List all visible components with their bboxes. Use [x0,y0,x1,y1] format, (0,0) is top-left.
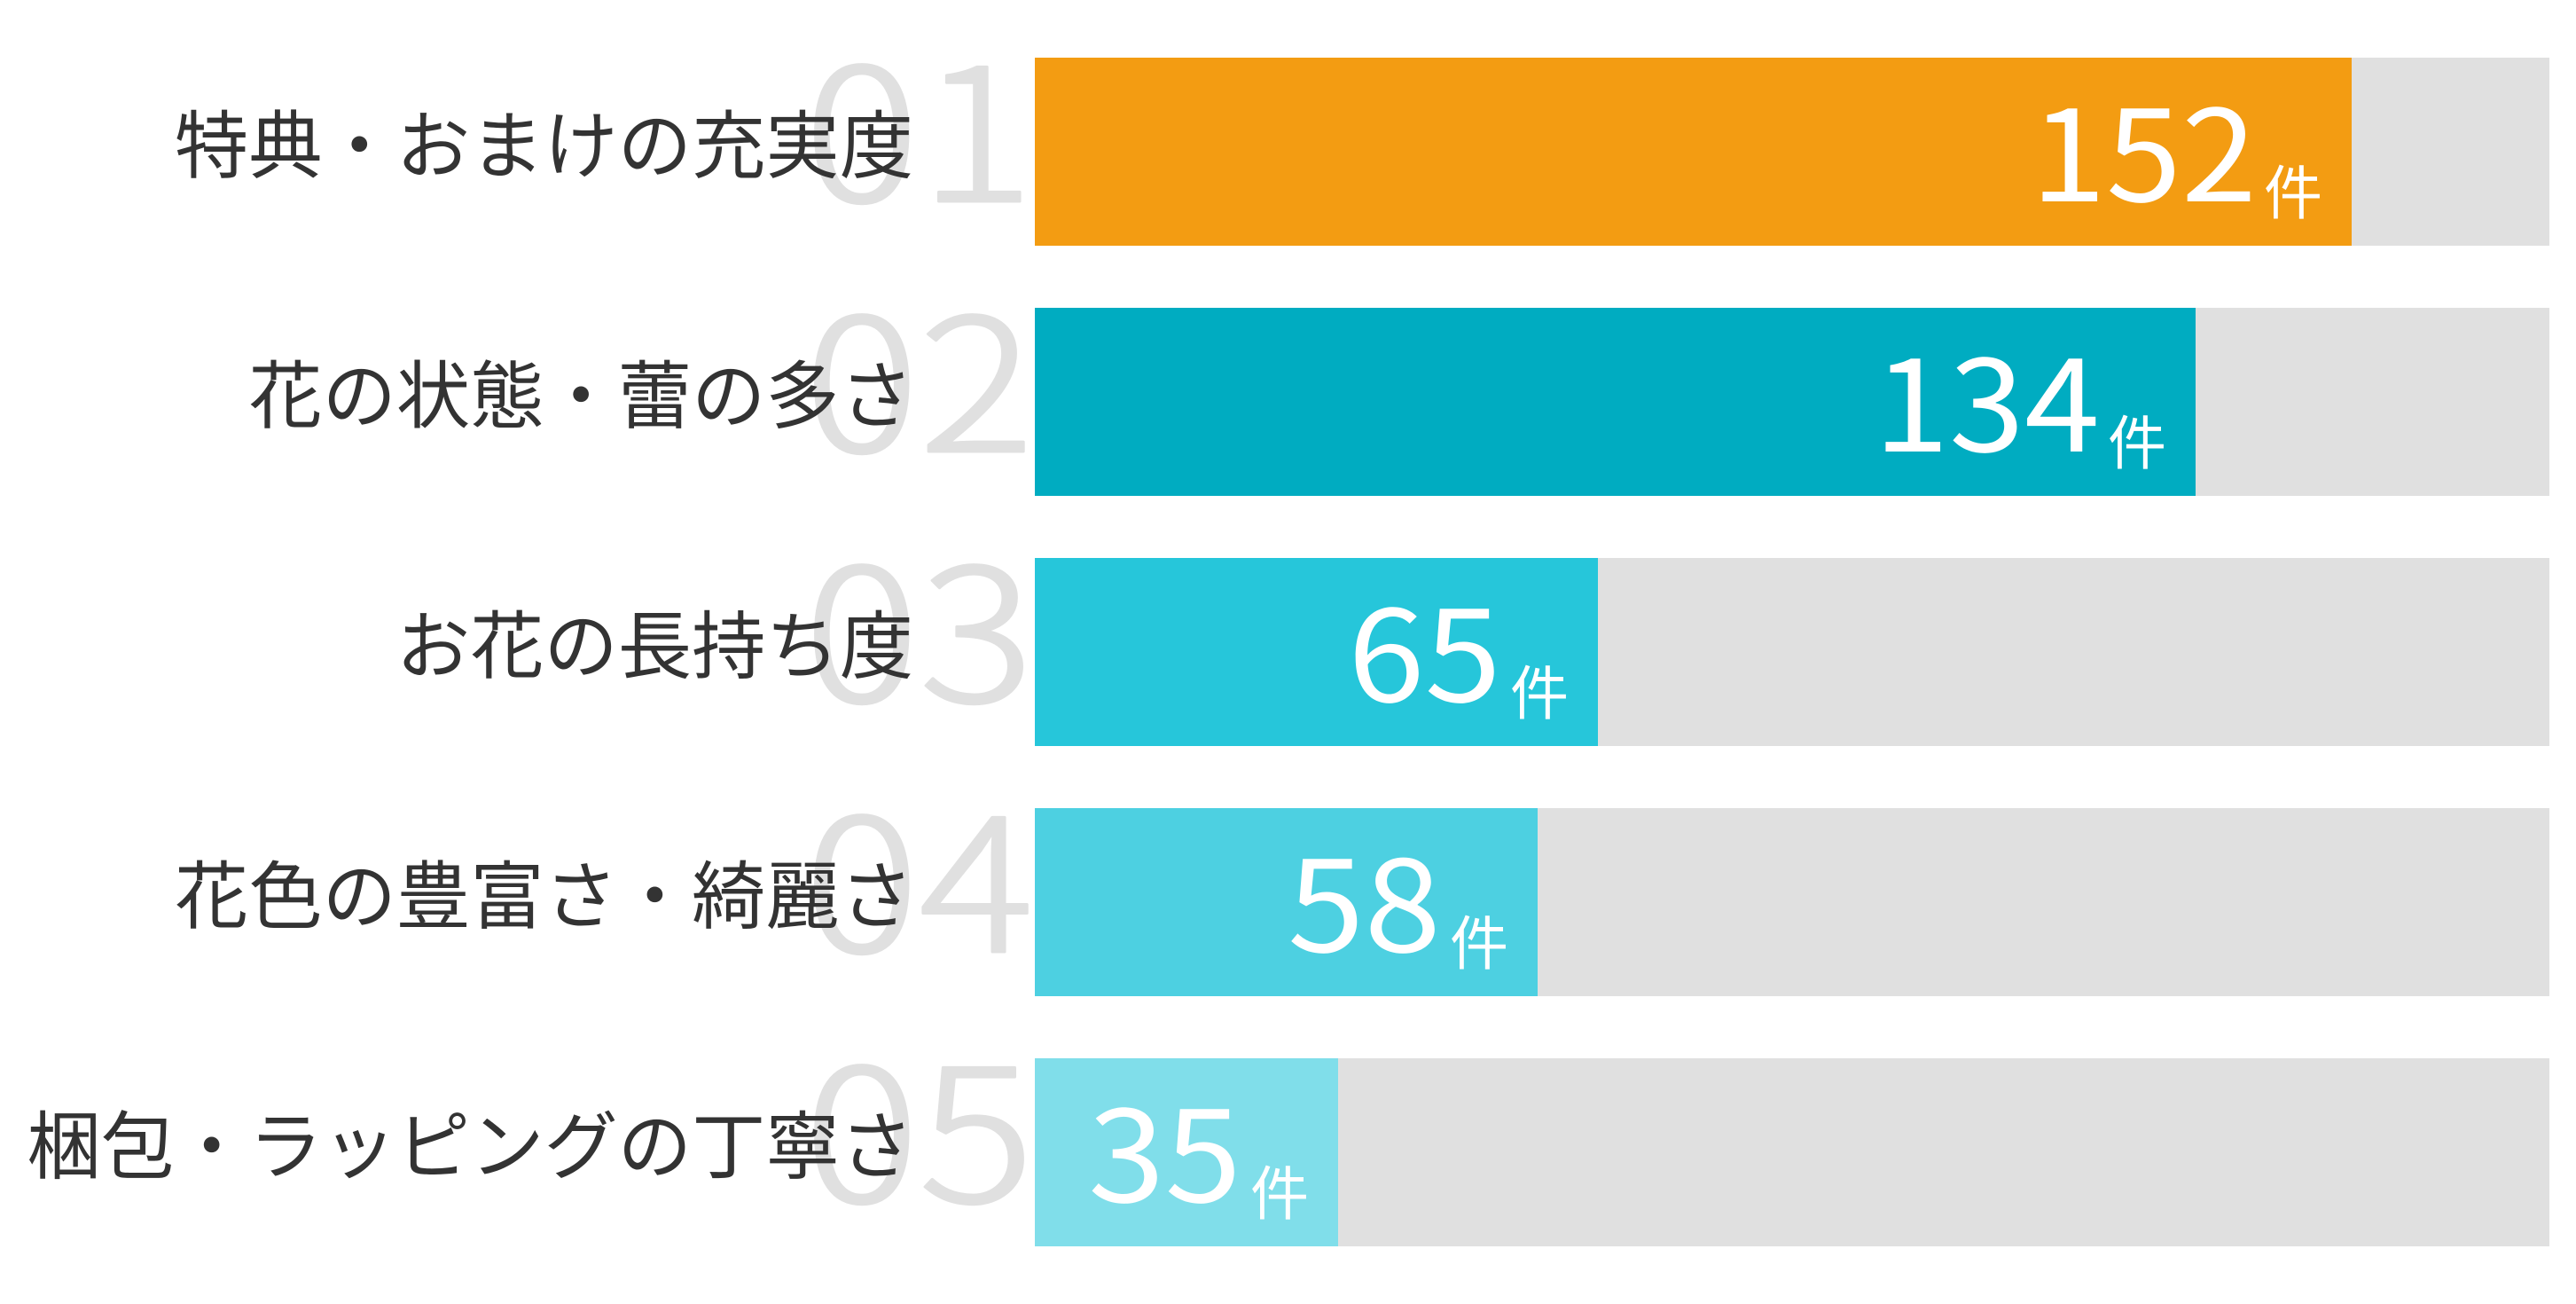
label 3: お花の長持ち度 [396,586,913,694]
unit 件: 件 [2264,146,2322,232]
unit 件: 件 [1450,897,1508,982]
bar value 2 [1035,308,2196,496]
bar track 2 [1035,308,2549,496]
label 5: 梱包・ラッピングの丁寧さ [27,1087,913,1194]
bar track 1 [1035,58,2549,246]
row 3: お花の長持ち度 [396,488,2549,755]
unit 件: 件 [2108,397,2166,482]
value 152: 152 [2031,55,2257,239]
rank number 02: 02 [804,238,1034,505]
row 4: 花色の豊富さ・綺麗さ [175,738,2549,1005]
bar value 4 [1035,808,1538,996]
bar value 1 [1035,58,2352,246]
label 4: 花色の豊富さ・綺麗さ [175,837,913,944]
row 2: 花の状態・蕾の多さ [248,238,2549,505]
bar value 3 [1035,558,1598,746]
value 35: 35 [1088,1056,1241,1239]
bar track 3 [1035,558,2549,746]
unit 件: 件 [1510,647,1569,732]
rank number 04: 04 [804,738,1034,1005]
label 2: 花の状態・蕾の多さ [248,336,913,444]
value 58: 58 [1288,805,1441,989]
row 5: 梱包・ラッピングの丁寧さ [27,988,2549,1255]
bar track 4 [1035,808,2549,996]
value 134: 134 [1874,305,2100,489]
bar track 5 [1035,1058,2549,1246]
rank number 05: 05 [804,988,1034,1255]
row 1: 特典・おまけの充実度 [175,0,2549,255]
unit 件: 件 [1250,1147,1309,1232]
rank number 03: 03 [804,488,1034,755]
value 65: 65 [1348,555,1501,739]
label 1: 特典・おまけの充実度 [175,86,913,193]
bar value 5 [1035,1058,1338,1246]
